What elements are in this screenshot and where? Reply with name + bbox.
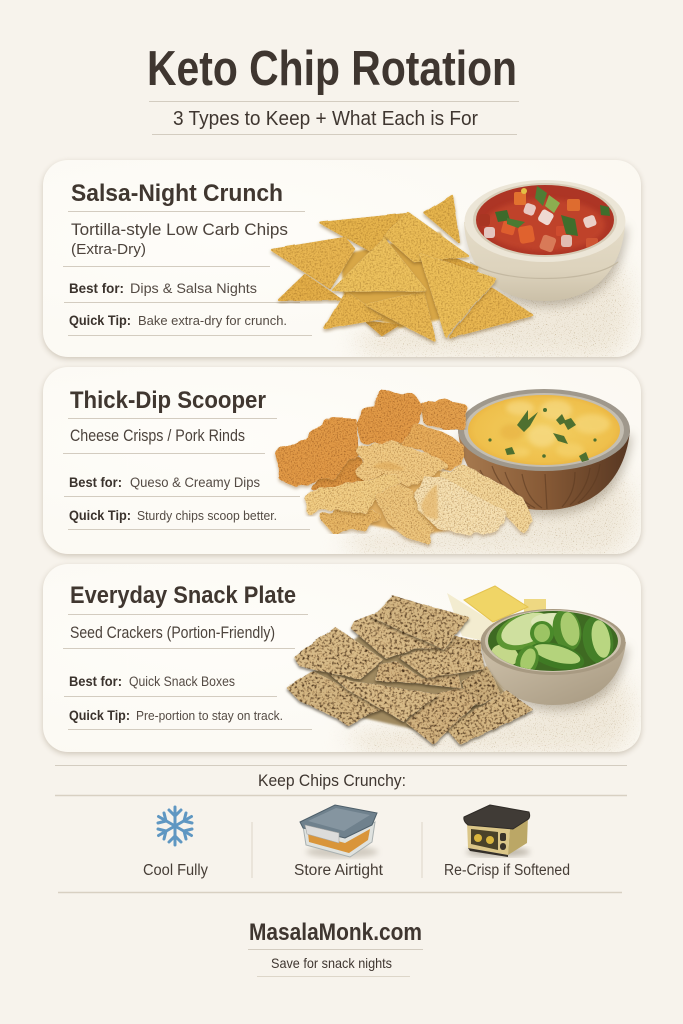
dust and crumbs [340,672,633,755]
cheese slices [447,586,546,640]
chip type note: (Extra-Dry) [71,241,146,258]
icon: toaster oven [464,805,530,857]
section: keep chips crunchy [55,766,627,892]
quick tip: Quick Tip: [69,313,131,328]
label: cool fully: Cool Fully [143,862,208,879]
label: store airtight: Store Airtight [294,862,384,879]
panel: thick-dip scooper [43,367,641,558]
panel: salsa-night crunch [43,160,641,360]
label: re-crisp if softened: Re-Crisp if Softened [444,862,570,879]
tagline: Save for snack nights [271,955,392,971]
footer [248,919,423,976]
dust and crumbs [350,254,631,360]
bowl of salsa [464,180,626,301]
card heading: Everyday Snack Plate [70,582,296,609]
bowl of queso [458,389,630,510]
cheese crisps and pork rinds [279,395,531,541]
icon: snowflake [158,807,192,845]
panel: everyday snack plate [43,564,641,755]
tortilla chips [272,196,532,341]
seed crackers [288,597,532,743]
best for: Quick Snack Boxes [129,674,235,689]
chip type: Cheese Crisps / Pork Rinds [70,426,245,445]
chip type: Tortilla-style Low Carb Chips [71,220,288,239]
dust and crumbs [340,471,633,558]
section heading: Keep Chips Crunchy: [258,772,406,790]
best for: Best for: [69,674,122,689]
website name: MasalaMonk.com [249,919,422,946]
best for: Dips & Salsa Nights [130,281,257,296]
title block [147,42,519,134]
best for: Queso & Creamy Dips [130,475,260,490]
quick tip: Quick Tip: [69,508,131,523]
best for: Best for: [69,475,122,490]
bowl of cucumbers [480,604,626,705]
quick tip: Bake extra-dry for crunch. [138,313,287,328]
chip type: Seed Crackers (Portion-Friendly) [70,623,275,642]
card heading: Thick-Dip Scooper [70,387,266,414]
best for: Best for: [69,281,124,296]
quick tip: Sturdy chips scoop better. [137,508,277,523]
quick tip: Pre-portion to stay on track. [136,708,283,723]
icon: airtight container [300,805,378,858]
subtitle: 3 Types to Keep + What Each is For [173,107,478,130]
title: Keto Chip Rotation [147,42,517,96]
quick tip: Quick Tip: [69,708,130,723]
card heading: Salsa-Night Crunch [71,180,283,207]
